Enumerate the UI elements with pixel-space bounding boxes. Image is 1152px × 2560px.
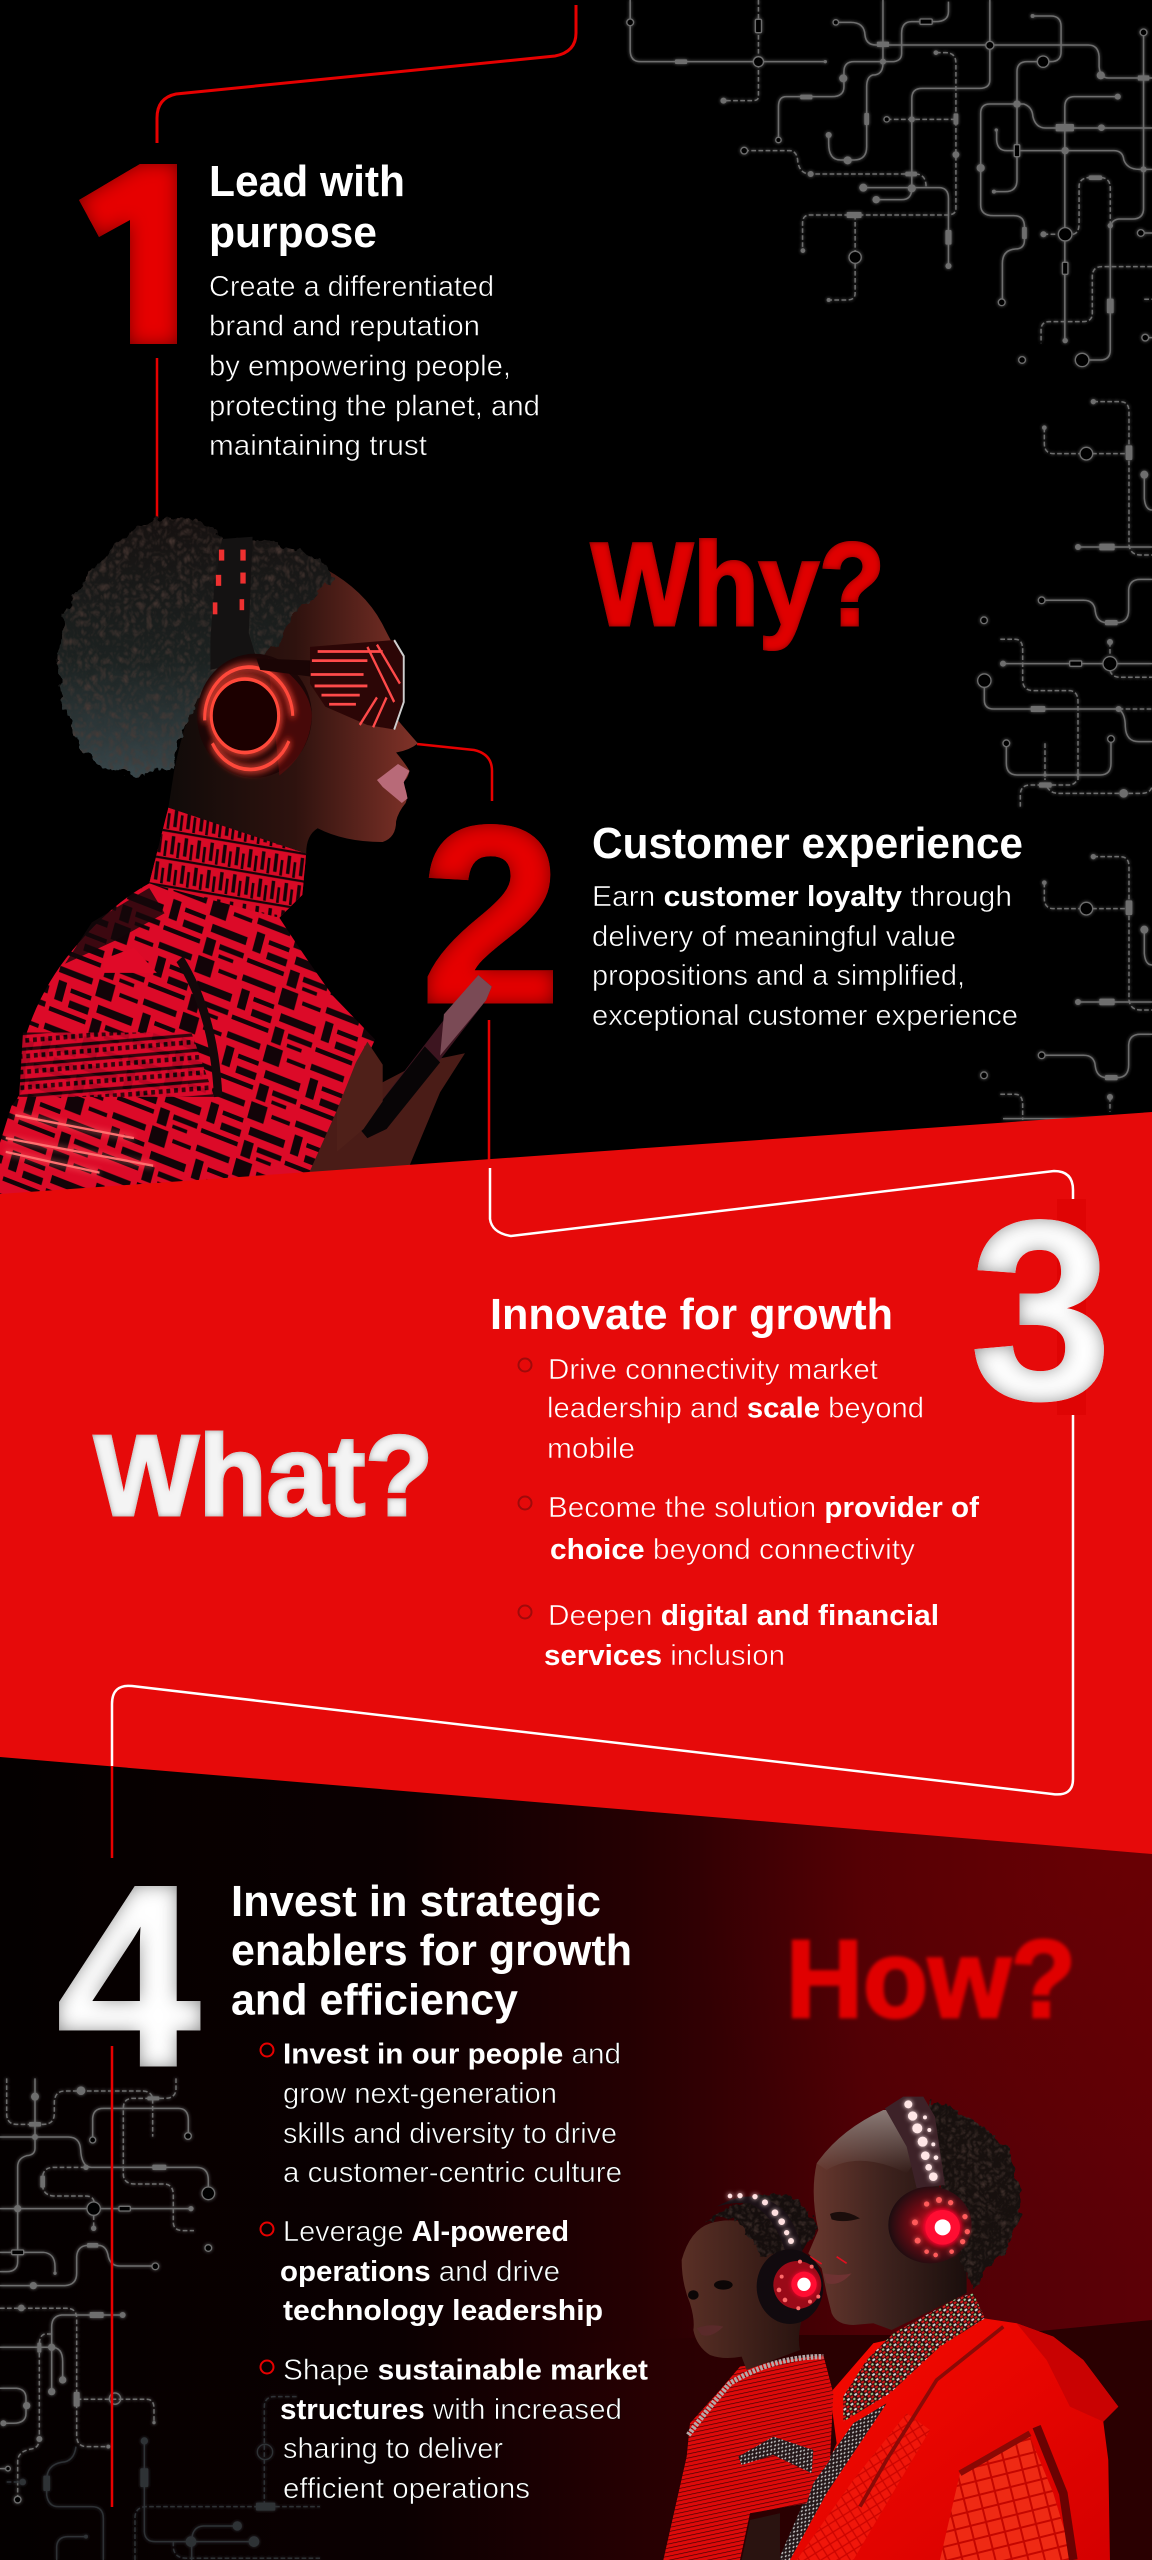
item 3: Shape sustainable market [283,2354,648,2386]
face [168,569,418,854]
item 2: choice beyond connectivity [550,1534,916,1566]
thumb [337,1042,383,1152]
headband [210,537,256,670]
text block: lead with purpose: maintaining trust [209,430,427,462]
white connector frame [112,1168,1073,1794]
item 1 [547,1354,924,1465]
phone [360,975,492,1138]
item 2: Leverage AI-powered [283,2216,569,2248]
circuit pattern: right side lower [981,780,1152,1120]
text block: customer experience: Earn customer loyalty through [592,881,1012,913]
item 2 [548,1492,979,1566]
list: strategic enablers [260,2038,648,2505]
item 2: Become the solution provider of [548,1492,979,1524]
grandmother hair [930,2102,1020,2290]
item 1: leadership and scale beyond [547,1392,924,1424]
item 3: sharing to deliver [283,2433,503,2465]
circuit pattern: bottom left faded [7,2397,320,2560]
connector line below number 2 [488,1020,490,1160]
circuit pattern: bottom left [0,2078,215,2503]
heading: innovate for growth: Innovate for growth [490,1290,893,1339]
red connector through circuit [111,2046,113,2507]
heading: what: What? [94,1413,433,1540]
item 3: structures with increased [280,2394,622,2426]
heading: customer experience: Customer experience [592,819,1023,868]
red band: what [0,1112,1152,1854]
number 4: 4 [57,1831,202,2120]
sweater [0,808,375,1198]
bullet marks [518,1358,532,1618]
grandmother headphones [885,2097,972,2263]
text block: lead with purpose: brand and reputation [209,310,480,342]
text block: lead with purpose: by empowering people, [209,350,511,382]
text block: customer experience: exceptional customer experience [592,1000,1018,1032]
text block: customer experience [592,881,1018,1032]
child hair [703,2193,817,2257]
list: innovate for growth [518,1354,979,1672]
heading: lead with purpose: purpose [209,208,377,257]
figures: grandmother and child with LED headphones [663,2097,1118,2560]
item 3 [544,1600,939,1672]
heading: lead with purpose [209,157,405,257]
heading: why: Why? [591,519,885,651]
item 3: efficient operations [283,2473,530,2505]
lips [377,764,409,803]
child face [682,2220,803,2370]
text block: customer experience: delivery of meaningful value [592,921,956,953]
red connector below band [111,1766,113,1858]
item 3 [280,2354,648,2505]
item 1: Drive connectivity market [548,1354,878,1386]
figure: woman with glowing headphones and phone [0,518,492,1198]
item 2 [280,2216,603,2327]
bullet marks [260,2044,274,2374]
text block: lead with purpose: protecting the planet, and [209,390,540,422]
item 1: mobile [547,1433,635,1465]
connector line below number 1 [156,358,158,518]
heading: invest in strategic enablers [231,1877,632,2024]
palm and fingers [299,1053,465,1175]
child headphones [717,2193,823,2324]
item 3: Deepen digital and financial [548,1600,939,1632]
heading: invest in strategic enablers: and efficiency [231,1976,519,2024]
number 2: 2 [421,775,561,1054]
hair [57,518,333,775]
ear cup [197,654,312,778]
item 1: a customer-centric culture [283,2157,622,2189]
child dress [663,2355,833,2560]
glasses [256,640,404,730]
item 1 [283,2038,622,2189]
panel behind number 3 [1057,1199,1086,1415]
item 1: grow next-generation [283,2078,557,2110]
text block: lead with purpose [209,271,540,462]
grandmother robe [787,2318,1118,2560]
circuit pattern: top right [627,0,1152,367]
item 3: services inclusion [544,1640,785,1672]
number 3: 3 [970,1168,1112,1452]
grandmother face [808,2110,967,2330]
item 1: skills and diversity to drive [283,2118,617,2150]
heading: how: How? [786,1918,1076,2041]
item 2: technology leadership [283,2295,603,2327]
heading: lead with purpose: Lead with [209,157,405,206]
bottom section background [0,1700,1152,2560]
grandmother necklace [778,2293,985,2560]
circuit pattern: right side upper [978,399,1152,780]
item 1: Invest in our people and [283,2038,621,2070]
item 2: operations and drive [280,2256,560,2288]
number 1: 1 [70,112,213,399]
text block: lead with purpose: Create a differentiated [209,271,494,303]
top connector line [157,5,576,143]
heading: invest in strategic enablers: enablers for growth [231,1926,632,1975]
connector line from nose [417,744,492,801]
heading: invest in strategic enablers: Invest in strategic [231,1877,601,1926]
text block: customer experience: propositions and a simplified, [592,960,965,992]
